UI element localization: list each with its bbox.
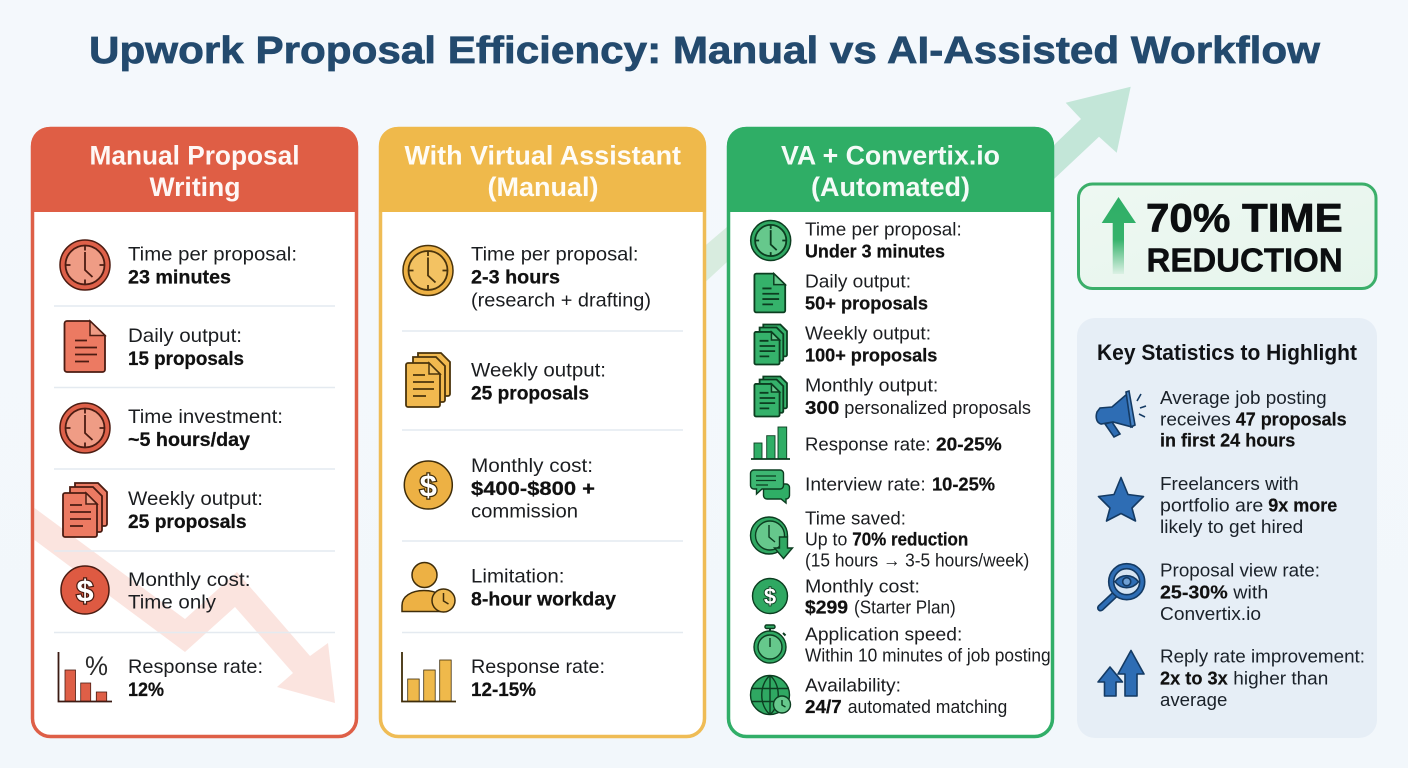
icon: globe with clock: [750, 676, 790, 714]
text: monthly output: personalized proposals: [844, 397, 1031, 418]
panel card: [728, 128, 1052, 736]
row: time per proposal: [403, 244, 651, 312]
stat: reply rate: [1098, 646, 1365, 710]
text: portfolio: 9x more: [1268, 495, 1337, 516]
row: monthly cost: [61, 566, 250, 614]
text: time per proposal: Time per proposal:: [805, 218, 962, 240]
text: proposal view rate: with: [1232, 581, 1268, 602]
text: limitation: Limitation:: [471, 566, 564, 588]
text: weekly output: Weekly output:: [805, 322, 931, 344]
row: weekly output: [63, 483, 263, 537]
text: response rate: [805, 434, 1002, 454]
text: response rate: 20-25%: [936, 434, 1002, 454]
text: time per proposal: [471, 244, 651, 312]
text: monthly cost: (Starter Plan): [854, 596, 956, 618]
icon: dollar coin: [404, 461, 452, 509]
text: application speed: [805, 624, 1051, 666]
panel: with virtual assistant: [379, 127, 706, 736]
row: time per proposal: [60, 240, 297, 290]
icon: stacked documents: [754, 325, 787, 364]
icon: magnifier with eye: [1098, 564, 1145, 611]
text: application speed: Application speed:: [805, 624, 962, 644]
text: availability: [805, 674, 1007, 717]
icon: clock: [60, 240, 110, 290]
row: time saved: [750, 508, 1029, 570]
text: proposals per job: 47 proposals: [1236, 409, 1347, 430]
row: response rate: [58, 651, 263, 702]
row: daily output: [754, 270, 928, 314]
text: time saved: (15 hours → 3-5 hours/week): [805, 550, 1029, 570]
icon: star: [1098, 478, 1144, 521]
text: reply rate: average: [1160, 689, 1227, 710]
icon: dollar coin: [61, 566, 109, 614]
text: monthly cost: Monthly cost:: [128, 569, 250, 591]
text: portfolio: likely to get hired: [1160, 516, 1303, 537]
text: portfolio: portfolio are: [1160, 495, 1263, 516]
text: reply rate: [1160, 646, 1365, 710]
text: proposals per job: in first 24 hours: [1160, 430, 1295, 451]
text: availability: Availability:: [805, 674, 901, 696]
text: weekly output: 25 proposals: [128, 511, 247, 533]
text: time per proposal: Time per proposal:: [128, 244, 297, 266]
row: response rate: [402, 652, 605, 702]
text: time per proposal: [128, 244, 297, 288]
text: weekly output: [128, 488, 263, 533]
icon: stacked documents: [63, 483, 107, 537]
text: weekly output: [471, 360, 606, 404]
text: monthly output: [805, 374, 1031, 418]
text: daily output: [128, 325, 244, 370]
panel header: (Automated): [811, 172, 970, 202]
text: weekly output: [805, 322, 937, 366]
icon: bar chart: [751, 427, 790, 459]
text: monthly cost: Monthly cost:: [805, 576, 920, 596]
text: limitation: [471, 566, 616, 610]
text: time investment: ~5 hours/day: [128, 429, 250, 451]
panel card: [32, 128, 356, 736]
text: proposal view rate: Proposal view rate:: [1160, 560, 1320, 581]
text: weekly output: 25 proposals: [471, 382, 589, 404]
text: response rate: Response rate:: [805, 434, 931, 454]
title: Upwork Proposal Efficiency: Manual vs AI-Assisted Workflow: [89, 30, 1320, 72]
arrow: falling red trend: [34, 508, 335, 703]
row: time investment: [60, 403, 283, 453]
text: monthly cost: $299: [805, 596, 848, 618]
text: monthly output: 300: [805, 397, 839, 418]
arrow: rising green trend behind panels: [700, 87, 1131, 287]
text: response rate: Response rate:: [471, 656, 605, 678]
icon: person with clock: [402, 562, 455, 612]
panel header: [727, 127, 1054, 212]
row: response rate: [751, 427, 1002, 459]
icon: clock: [60, 403, 110, 453]
stat: portfolio: [1098, 473, 1337, 537]
text: reply rate: 2x to 3x: [1160, 668, 1228, 689]
callout box: [1078, 184, 1376, 288]
text: weekly output: Weekly output:: [471, 360, 606, 382]
row: application speed: [754, 624, 1051, 666]
panel header: VA + Convertix.io: [781, 140, 1000, 170]
panel heading: Key Statistics to Highlight: [1097, 340, 1358, 365]
text: application speed: Within 10 minutes of job posting: [805, 644, 1051, 666]
text: portfolio: [1160, 473, 1337, 537]
icon: document: [754, 274, 785, 312]
row: weekly output: [406, 353, 606, 407]
row: monthly cost: [752, 576, 956, 618]
text: proposals per job: [1160, 387, 1347, 451]
text: proposal view rate: Convertix.io: [1160, 603, 1261, 624]
text: proposal view rate: 25-30%: [1160, 581, 1228, 602]
text: monthly output: Monthly output:: [805, 374, 938, 396]
icon: bar chart with percent: [58, 651, 112, 702]
text: reply rate: higher than: [1233, 668, 1328, 689]
callout text: 70% TIME: [1146, 197, 1343, 241]
text: response rate: 12-15%: [471, 679, 536, 701]
text: response rate: [471, 656, 605, 701]
callout text: REDUCTION: [1146, 242, 1343, 279]
text: limitation: 8-hour workday: [471, 588, 616, 610]
icon: document: [64, 321, 105, 372]
panel header: With Virtual Assistant: [404, 140, 681, 170]
text: daily output: Daily output:: [805, 270, 911, 292]
panel: VA + Convertix.io automated: [727, 127, 1054, 736]
row: time per proposal: [751, 218, 962, 262]
text: time per proposal: Time per proposal:: [471, 244, 638, 266]
text: monthly cost: commission: [471, 500, 578, 522]
text: monthly cost: [805, 576, 956, 618]
row: monthly output: [754, 374, 1031, 418]
text: time per proposal: 23 minutes: [128, 266, 231, 288]
text: monthly cost: [471, 455, 595, 522]
icon: dollar coin: $: [764, 584, 776, 609]
text: response rate: 12%: [128, 679, 164, 701]
text: time per proposal: Under 3 minutes: [805, 240, 945, 262]
text: time per proposal: [805, 218, 962, 262]
text: proposals per job: receives: [1160, 409, 1231, 430]
text: response rate: Response rate:: [128, 656, 263, 678]
text: time saved: [805, 508, 1029, 570]
text: response rate: [128, 656, 263, 701]
row: availability: [750, 674, 1007, 717]
row: daily output: [64, 321, 244, 372]
row: weekly output: [754, 322, 937, 366]
text: availability: automated matching: [848, 696, 1007, 717]
text: availability: 24/7: [805, 696, 842, 717]
icon: bar chart with percent: %: [85, 651, 108, 681]
text: interview rate: [805, 474, 995, 494]
text: monthly cost: Time only: [128, 592, 216, 614]
text: portfolio: Freelancers with: [1160, 473, 1299, 494]
text: time saved: Up to: [805, 528, 847, 550]
stat: proposal view rate: [1098, 560, 1320, 624]
text: daily output: [805, 270, 928, 314]
text: monthly cost: $400-$800 +: [471, 478, 595, 500]
panel: manual proposal writing: [31, 127, 358, 736]
icon: dollar coin: [752, 578, 788, 614]
text: weekly output: Weekly output:: [128, 488, 263, 510]
text: time saved: 70% reduction: [852, 528, 968, 550]
panel header: (Manual): [488, 172, 598, 202]
panel header: [31, 127, 358, 212]
text: monthly cost: Monthly cost:: [471, 455, 593, 477]
text: daily output: 15 proposals: [128, 348, 244, 370]
text: time saved: Time saved:: [805, 508, 906, 528]
text: proposal view rate: [1160, 560, 1320, 624]
text: time investment: Time investment:: [128, 406, 283, 428]
stat: proposals per job: [1096, 387, 1347, 451]
icon: dollar coin: $: [76, 573, 94, 608]
panel header: Manual Proposal: [90, 140, 300, 170]
icon: bar chart: [402, 652, 456, 702]
text: daily output: Daily output:: [128, 325, 242, 347]
icon: chat bubbles: [750, 470, 790, 503]
icon: clock: [751, 220, 791, 260]
text: weekly output: 100+ proposals: [805, 344, 937, 366]
row: interview rate: [750, 470, 995, 503]
text: time per proposal: 2-3 hours: [471, 266, 560, 288]
text: time per proposal: (research + drafting): [471, 290, 651, 312]
panel header: [379, 127, 706, 212]
text: monthly cost: [128, 569, 250, 614]
icon: clock: [403, 246, 453, 296]
text: interview rate: 10-25%: [932, 474, 995, 494]
row: limitation: [402, 562, 616, 612]
panel header: Writing: [150, 172, 240, 202]
text: time investment: [128, 406, 283, 451]
icon: stacked documents: [406, 353, 450, 407]
text: reply rate: Reply rate improvement:: [1160, 646, 1365, 667]
icon: stopwatch: [754, 625, 786, 663]
panel card: [380, 128, 704, 736]
icon: megaphone: [1096, 391, 1146, 437]
text: interview rate: Interview rate:: [805, 474, 926, 494]
callout text: [1146, 197, 1343, 279]
icon: green up arrow: [1102, 197, 1136, 274]
icon: clock with down arrow: [750, 517, 792, 558]
callout: 70% time reduction: [1078, 184, 1376, 288]
text: daily output: 50+ proposals: [805, 292, 928, 314]
text: proposals per job: Average job posting: [1160, 387, 1327, 408]
row: monthly cost: [404, 455, 595, 522]
icon: two up arrows: [1098, 650, 1144, 696]
panel: key statistics: [1077, 318, 1377, 738]
panel background: [1077, 318, 1377, 738]
icon: dollar coin: $: [420, 468, 437, 503]
icon: stacked documents: [754, 377, 787, 416]
